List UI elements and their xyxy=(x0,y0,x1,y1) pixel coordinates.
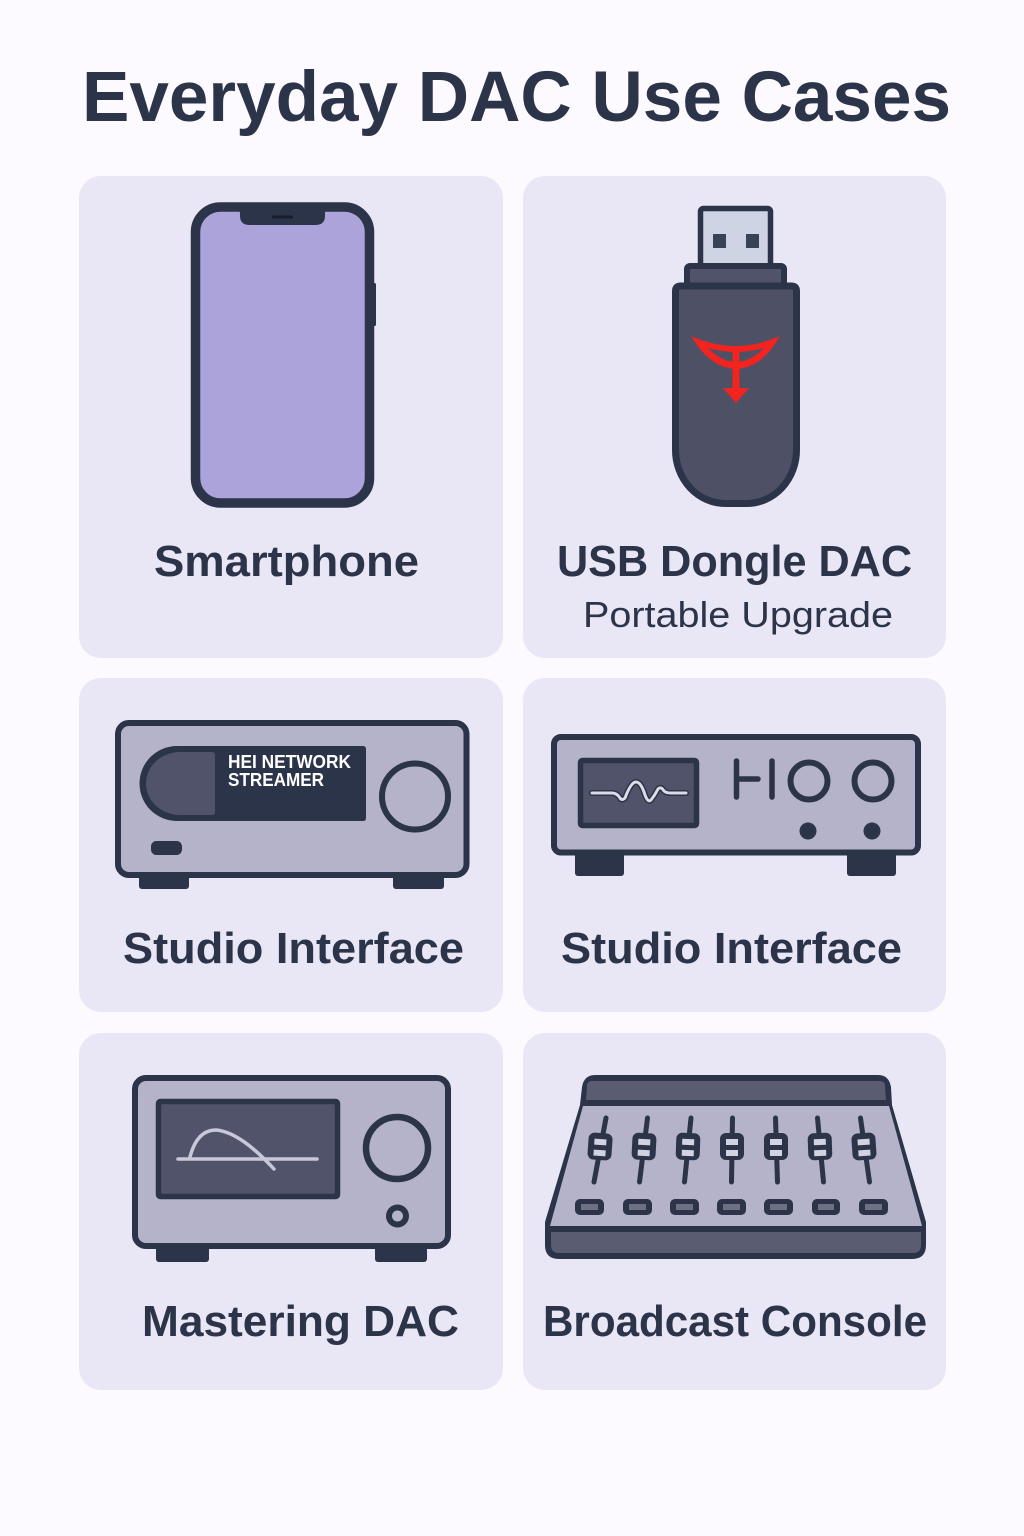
panel: studio interface xyxy=(523,678,946,1012)
icon: red USB symbol xyxy=(691,336,780,403)
panel: broadcast console xyxy=(523,1033,946,1390)
label: Broadcast Console: Broadcast Console xyxy=(543,1297,927,1346)
label: USB Dongle DAC: USB Dongle DAC xyxy=(557,537,912,586)
label: Studio Interface: Studio Interface xyxy=(561,924,902,973)
panel: USB dongle DAC xyxy=(523,176,946,658)
panel: mastering DAC xyxy=(79,1033,503,1390)
icon: mastering DAC xyxy=(135,1078,448,1262)
panel: network streamer xyxy=(79,678,503,1012)
label: Studio Interface: Studio Interface xyxy=(123,924,464,973)
sublabel: Portable Upgrade: Portable Upgrade xyxy=(583,594,893,635)
display text: HEI NETWORK xyxy=(228,752,351,772)
icon: smartphone xyxy=(196,206,376,503)
label: smartphone: Smartphone xyxy=(154,537,419,586)
faders xyxy=(594,1118,870,1182)
label: Mastering DAC: Mastering DAC xyxy=(142,1297,459,1346)
title: Everyday DAC Use Cases xyxy=(82,58,951,137)
panel: smartphone xyxy=(79,176,503,658)
icon: USB dongle xyxy=(676,208,796,504)
icon: network streamer xyxy=(118,723,466,889)
display text xyxy=(228,752,351,790)
icon: broadcast console xyxy=(545,1075,926,1259)
icon: studio interface xyxy=(554,737,918,876)
display text: STREAMER xyxy=(228,770,324,790)
channel buttons xyxy=(575,1199,888,1215)
fader handles xyxy=(587,1132,877,1161)
